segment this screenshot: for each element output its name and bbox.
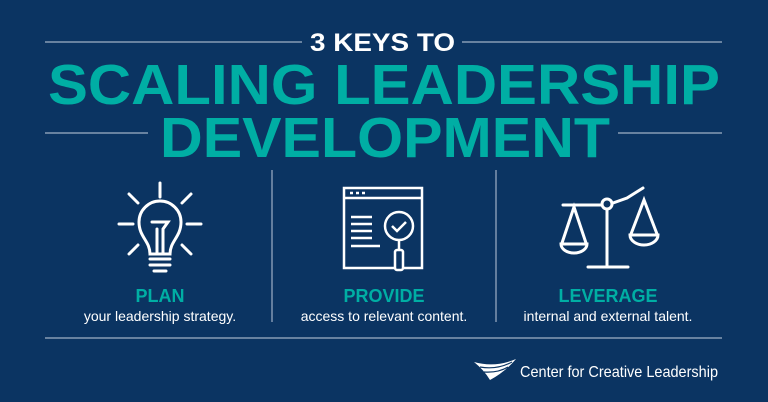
- icon: document with magnifier: [344, 188, 422, 270]
- title: 3 keys to: 3 KEYS TO: [310, 29, 455, 57]
- text: plan desc: your leadership strategy.: [84, 308, 236, 324]
- heading: plan: PLAN: [136, 286, 184, 306]
- heading: leverage: LEVERAGE: [558, 286, 658, 306]
- text: provide desc: access to relevant content.: [301, 308, 467, 324]
- logo: [474, 359, 718, 381]
- logo: Center for Creative Leadership: [520, 364, 718, 381]
- icon: lightbulb: [119, 183, 201, 271]
- heading: provide: PROVIDE: [343, 286, 425, 306]
- text: leverage desc: internal and external talent.: [524, 308, 692, 324]
- title: scaling leadership: SCALING LEADERSHIP: [48, 53, 720, 117]
- title: development: DEVELOPMENT: [160, 106, 610, 170]
- icon: scales: [561, 188, 658, 267]
